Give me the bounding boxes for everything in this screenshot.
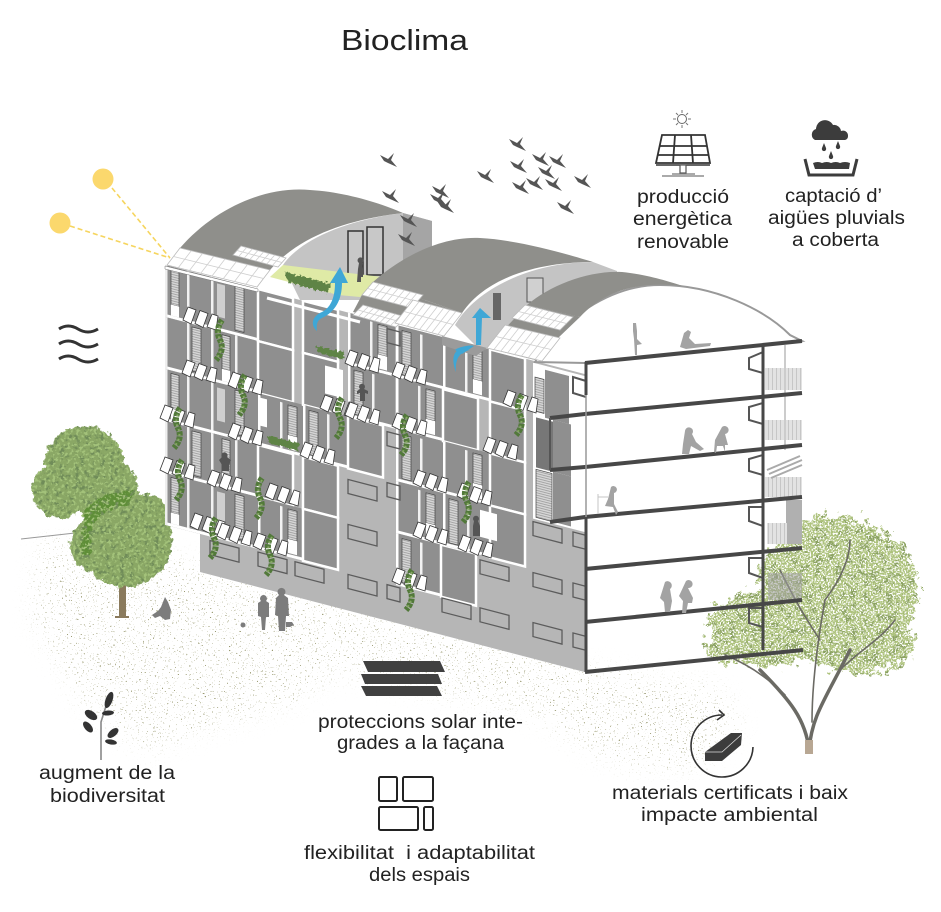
- roof vault 1 interior: [267, 213, 470, 322]
- green terrace: [270, 265, 382, 297]
- wing B panels: [303, 301, 525, 618]
- climbing plants: [174, 320, 522, 610]
- roof vault 2 interior: [442, 262, 617, 356]
- white window openings: [258, 348, 497, 541]
- label: biodiversity: [39, 763, 175, 807]
- roof vault 2 grey barrel: [373, 238, 593, 313]
- people inside section: [598, 323, 729, 613]
- tree: left: [21, 426, 172, 617]
- title: Bioclima: [341, 25, 469, 57]
- label: solar protections: proteccions solar inte-: [318, 712, 523, 733]
- icon: certified materials: [691, 710, 753, 777]
- yoga figure: [633, 323, 642, 355]
- roof vault 1 grey barrel: [180, 190, 403, 270]
- people on facade: [219, 257, 480, 536]
- concrete wall: [200, 274, 586, 672]
- icon: rain water collection: [805, 120, 857, 175]
- tree: right: [705, 516, 918, 754]
- label: flexibility: dels espais: [369, 865, 470, 886]
- planter: [285, 272, 330, 293]
- photovoltaic panels vault 2: [353, 282, 462, 336]
- label: rainwater: captació d’: [785, 186, 882, 207]
- seated pair: [682, 427, 704, 454]
- solar shading flaps: [160, 307, 538, 591]
- person at desk: [605, 486, 618, 515]
- people on the ground: [152, 588, 294, 631]
- building facade: [165, 265, 586, 672]
- reclining figure: [680, 330, 711, 349]
- label: biodiversity: biodiversitat: [50, 786, 166, 807]
- wall windows: [210, 283, 586, 652]
- label: biodiversity: augment de la: [39, 763, 175, 784]
- label: rainwater: aigües pluvials: [768, 208, 905, 229]
- label: solar protections: [318, 712, 523, 754]
- icon: solar panel: [656, 110, 710, 176]
- sun rays and suns: [50, 168, 170, 258]
- roof vault 3 grey barrel: [527, 272, 683, 317]
- section end vault outline: [535, 285, 802, 363]
- airflow arrows: [313, 267, 491, 372]
- label: materials: materials certificats i baix: [612, 783, 849, 804]
- label: energy production: [633, 187, 732, 253]
- balcony planters: [268, 346, 345, 451]
- label: rainwater: a coberta: [792, 230, 879, 251]
- icon: solar protections: [361, 661, 445, 696]
- icon: flexible spaces: [379, 777, 433, 830]
- label: energy production: renovable: [637, 232, 729, 253]
- section window brackets: [573, 352, 763, 627]
- section balconies railing: [765, 345, 802, 600]
- icon: biodiversity sprig: [81, 691, 120, 760]
- wing C section edge: [533, 363, 586, 532]
- label: rainwater: [768, 186, 905, 251]
- ground speckle texture: [35, 540, 740, 770]
- section slabs and columns: [550, 341, 803, 672]
- label: materials: [612, 783, 849, 826]
- label: energy production: energètica: [633, 209, 732, 230]
- label: flexibility: flexibilitat i adaptabilitat: [304, 843, 536, 864]
- photovoltaic panels vault 1: [165, 246, 286, 292]
- wing A grid: [165, 265, 305, 561]
- label: energy production: producció: [637, 187, 729, 208]
- label: solar protections: grades a la façana: [337, 733, 504, 754]
- label: flexibility: [304, 843, 536, 886]
- icon: wind waves: [59, 326, 98, 362]
- flock of birds: [380, 137, 591, 246]
- pair at table: [660, 581, 672, 612]
- photovoltaic panels vault 3: [487, 305, 580, 361]
- label: materials: impacte ambiental: [641, 805, 818, 826]
